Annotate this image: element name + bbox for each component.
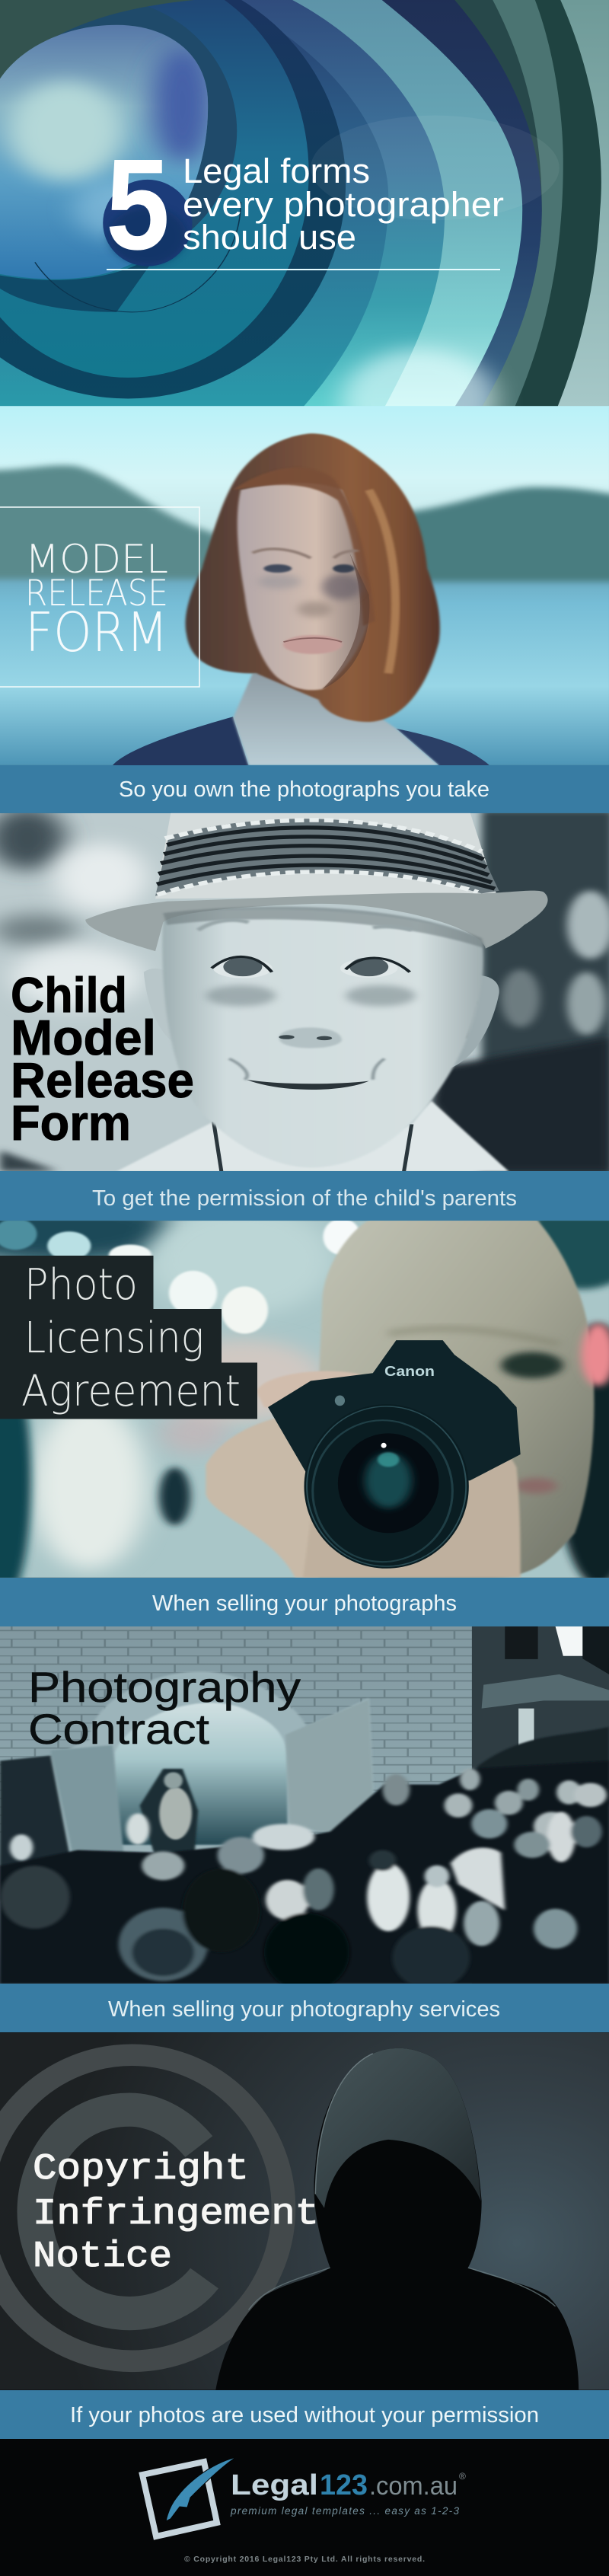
caption text: When selling your photography services <box>108 1997 500 2022</box>
heading: Copyright Infringement Notice <box>33 2149 319 2278</box>
heading: Photography Contract <box>28 1663 301 1753</box>
title: 5 Legal forms every photographer should use <box>106 132 504 277</box>
wordmark: .com.au: .com.au <box>369 2472 458 2501</box>
panel: child model release photo of boy in hat <box>0 807 609 1176</box>
heading plate: Photo <box>0 1256 154 1309</box>
copyright line: © Copyright 2016 Legal123 Pty Ltd. All rights reserved. <box>184 2555 425 2564</box>
heading plate: Agreement <box>0 1363 257 1419</box>
heading line: RELEASE: RELEASE <box>25 573 168 614</box>
wordmark: 123: 123 <box>320 2469 368 2501</box>
banner: child release caption <box>0 1171 609 1221</box>
panel: photography contract photo of wedding crowd <box>0 1626 609 1992</box>
heading line: Photography: Photography <box>28 1663 301 1711</box>
title underline <box>107 269 500 270</box>
caption text: To get the permission of the child's parents <box>92 1186 517 1211</box>
text box: Model Release Form <box>0 507 199 687</box>
figure: hooded person <box>215 2048 579 2391</box>
icon: copyright symbol watermark <box>0 2055 283 2361</box>
logo wordmark <box>231 2469 466 2501</box>
panel: hero lens background <box>0 0 609 407</box>
label: Canon camera brand: Canon <box>384 1364 435 1379</box>
title line 1: Legal forms <box>183 152 370 190</box>
heading line: Copyright: Copyright <box>33 2149 249 2190</box>
caption text: So you own the photographs you take <box>119 777 489 802</box>
caption text: If your photos are used without your permission <box>70 2403 539 2428</box>
banner: model release caption <box>0 765 609 813</box>
banner: licensing caption <box>0 1578 609 1626</box>
heading line: MODEL: MODEL <box>25 537 168 583</box>
logo tagline: premium legal templates ... easy as 1-2-3 <box>230 2505 459 2517</box>
panel: copyright infringement photo of hooded figure <box>0 2032 609 2391</box>
panel: photo licensing photo of photographer with camera <box>0 1221 609 1578</box>
heading line: Notice: Notice <box>33 2236 172 2278</box>
banner: contract caption <box>0 1984 609 2032</box>
heading line: Licensing: Licensing <box>24 1314 204 1363</box>
heading line: Form: Form <box>11 1095 131 1151</box>
heading plate: Licensing <box>0 1309 222 1363</box>
big number 5: 5 <box>106 132 170 277</box>
title line 2: every photographer <box>183 185 504 224</box>
title line 3: should use <box>183 218 356 257</box>
heading line: Model: Model <box>11 1010 156 1065</box>
heading line: Release: Release <box>11 1052 194 1108</box>
panel: model release photo of girl by lake <box>0 406 609 765</box>
heading line: Photo: Photo <box>24 1260 138 1310</box>
heading line: Infringement: Infringement <box>33 2194 319 2235</box>
heading line: FORM: FORM <box>25 601 168 664</box>
heading line: Agreement: Agreement <box>21 1367 241 1416</box>
banner: copyright caption <box>0 2390 609 2439</box>
caption text: When selling your photographs <box>152 1591 457 1616</box>
heading line: Child: Child <box>11 967 127 1023</box>
panel: footer with logo and copyright <box>0 2439 609 2576</box>
wordmark: Legal: Legal <box>231 2469 318 2501</box>
heading: Photo Licensing Agreement <box>0 1256 257 1419</box>
heading line: Contract: Contract <box>28 1705 209 1753</box>
heading: Child Model Release Form <box>11 967 194 1151</box>
icon: Legal123 logo frame and quill <box>142 2457 236 2536</box>
registered mark: ® <box>459 2471 466 2482</box>
box outline <box>0 507 199 687</box>
